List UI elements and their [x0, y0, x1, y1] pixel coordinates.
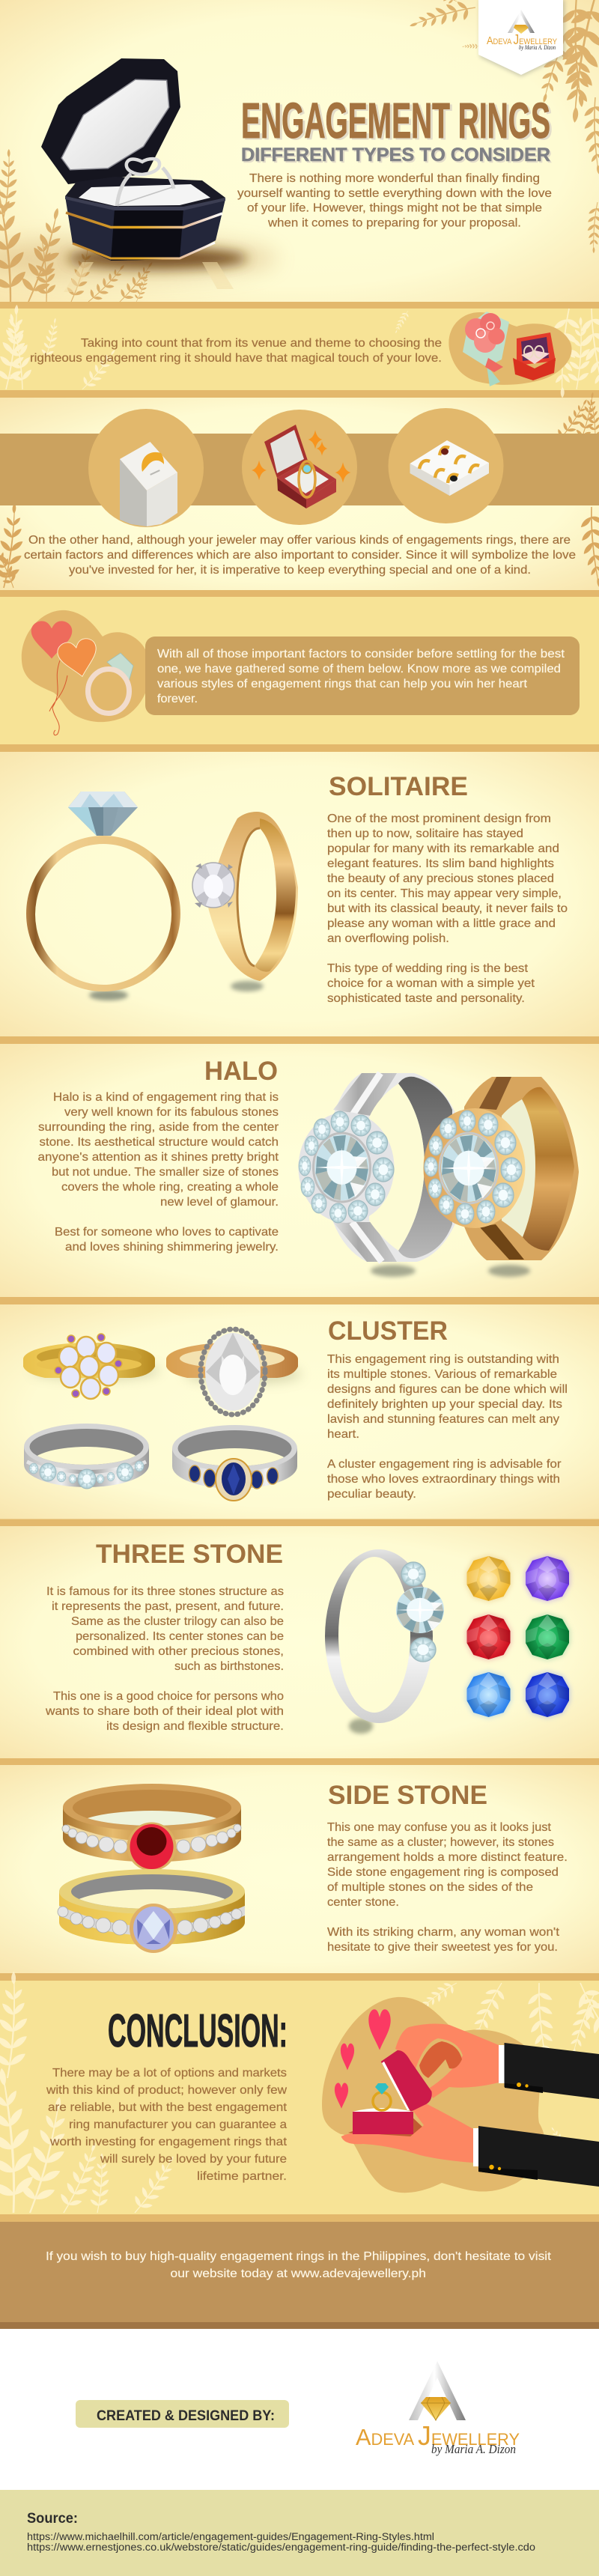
text: solitaire: but with its classical beauty, it never fails to: [327, 902, 568, 915]
icons: birthstone gems: [466, 1555, 570, 1718]
text: solitaire: on its center. This may appear very simple,: [327, 887, 562, 900]
text: three stone: it represents the past, present, and future.: [52, 1600, 284, 1613]
heading: solitaire: SOLITAIRE: [329, 772, 468, 801]
panel: solitaire: [0, 752, 599, 1036]
icon: red jewelry box: [242, 410, 357, 525]
text: side stone: the same as a cluster; however, its stones: [327, 1836, 554, 1849]
logo: Adeva Jewellery: [356, 2361, 520, 2456]
logo: Adeva Jewellery: ADEVA JEWELLERY: [356, 2420, 520, 2451]
illustration: ruby side stone ring: [62, 1784, 241, 1871]
text: solitaire: [327, 812, 568, 1005]
text: halo: stone. Its aesthetical structure would catch: [39, 1136, 279, 1149]
panel: conclusion: [0, 1970, 599, 2222]
intro text: There is nothing more wonderful than finally finding: [249, 172, 540, 185]
panel: side stone: [0, 1758, 599, 1981]
text: side stone: of multiple stones on the sides of the: [327, 1881, 533, 1894]
panel: sources: [0, 2490, 599, 2576]
text: halo: [37, 1091, 279, 1254]
text: side stone: arrangement holds a more distinct feature.: [327, 1851, 568, 1864]
panel: cluster: [0, 1297, 599, 1526]
foliage: factors edges: [0, 390, 599, 591]
factors text: On the other hand, although your jeweler may offer various kinds of engagements rings, there are: [28, 534, 571, 547]
text: three stone: This one is a good choice for persons who: [53, 1690, 284, 1703]
panel: halo: [0, 1036, 599, 1297]
factors text: [24, 534, 576, 577]
icon: ring on pedestal: [88, 409, 204, 527]
text: conclusion: There may be a lot of options and markets: [52, 2067, 287, 2080]
band text: [30, 337, 442, 365]
text: halo: but not undue. The smaller size of stones: [52, 1166, 279, 1179]
text: three stone: combined with other precious stones,: [73, 1645, 284, 1658]
text: cluster: This engagement ring is outstanding with: [327, 1353, 559, 1366]
text: solitaire: One of the most prominent design from: [327, 812, 551, 825]
foliage: band white leaves: [0, 303, 599, 399]
subtitle: DIFFERENT TYPES TO CONSIDER: [241, 145, 550, 165]
text: conclusion: [46, 2067, 288, 2183]
band text: Taking into count that from its venue and theme to choosing the: [81, 337, 442, 350]
panel: call to action: If you wish to buy high-quality engagement rings in the Philippines, don't hesitate to visit: [46, 2250, 552, 2263]
panel: venue band: [0, 302, 599, 399]
text: three stone: wants to share both of their ideal plot with: [45, 1705, 284, 1718]
text: three stone: It is famous for its three stones structure as: [46, 1585, 284, 1598]
panel: credits: [0, 2329, 599, 2490]
heading: halo: HALO: [204, 1057, 278, 1086]
text: solitaire: sophisticated taste and personality.: [327, 992, 525, 1005]
illustration: hands offering ring box: [322, 1997, 599, 2193]
text: solitaire: This type of wedding ring is the best: [327, 962, 529, 975]
illustration: gold halo ring: [424, 1077, 579, 1277]
illustration: tanzanite side stone ring: [58, 1869, 245, 1953]
panel: factors: [0, 390, 599, 591]
text: halo: and loves shining shimmering jewelry.: [65, 1241, 279, 1254]
illustration: silver diamond band: [24, 1424, 149, 1489]
text: halo: Best for someone who loves to captivate: [55, 1226, 279, 1239]
heading: three stone: THREE STONE: [96, 1540, 283, 1569]
source links: [27, 2531, 535, 2553]
text: solitaire: the beauty of any precious stones placed: [327, 872, 554, 885]
callout: compiled styles: forever.: [157, 693, 198, 705]
panel: three stone: [0, 1526, 599, 1758]
text: conclusion: are reliable, but with the best engagement: [48, 2101, 288, 2114]
text: solitaire: please any woman with a little grace and: [327, 917, 556, 930]
text: conclusion: worth investing for engagement rings that: [49, 2136, 288, 2148]
text: cluster: A cluster engagement ring is advisable for: [327, 1458, 562, 1471]
intro text: [237, 172, 552, 229]
text: conclusion: ring manufacturer you can guarantee a: [69, 2118, 287, 2131]
band text: righteous engagement ring it should have that magical touch of your love.: [30, 352, 442, 365]
text: cluster: heart.: [327, 1428, 359, 1441]
illustration: ring box: [0, 58, 277, 292]
text: halo: very well known for its fabulous stones: [64, 1106, 279, 1119]
text: halo: anyone's attention as it shines pretty bright: [37, 1151, 279, 1164]
text: halo: new level of glamour.: [160, 1196, 279, 1209]
text: side stone: With its striking charm, any woman won't: [327, 1926, 560, 1939]
credit pill: CREATED & DESIGNED BY:: [97, 2408, 275, 2424]
text: three stone: its design and flexible structure.: [106, 1720, 284, 1733]
icon: balloons and ring: [22, 610, 150, 735]
heading: cluster: CLUSTER: [328, 1316, 448, 1346]
panel: call to action: our website today at www.adevajewellery.ph: [171, 2267, 426, 2280]
text: cluster: designs and figures can be done which will: [327, 1383, 568, 1396]
brand badge: ADEVA JEWELLERY: [487, 32, 558, 47]
source links: https://www.ernestjones.co.uk/webstore/static/guides/engagement-ring-guide/finding-the-perfect-style.cdo: [27, 2542, 535, 2553]
text: conclusion: with this kind of product; however only few: [46, 2084, 287, 2097]
text: cluster: lavish and stunning features can melt any: [327, 1413, 559, 1426]
source links: https://www.michaelhill.com/article/engagement-guides/Engagement-Ring-Styles.html: [27, 2531, 434, 2542]
brown band: [0, 434, 599, 505]
text: conclusion: lifetime partner.: [197, 2170, 287, 2183]
logo: Adeva Jewellery: by Maria A. Dizon: [431, 2442, 516, 2456]
text: three stone: personalized. Its center stones can be: [76, 1630, 284, 1643]
heading: source: Source:: [27, 2511, 78, 2527]
heading: side stone: SIDE STONE: [328, 1781, 487, 1810]
credit pill: [76, 2400, 289, 2428]
text: solitaire: choice for a woman with a simple yet: [327, 977, 535, 990]
text: halo: covers the whole ring, creating a whole: [61, 1181, 279, 1194]
icon: ring tray: [388, 408, 503, 523]
brand badge: [478, 0, 565, 76]
callout: compiled styles: With all of those important factors to consider before settling for the best: [157, 648, 565, 660]
factors text: you've invested for her, it is imperative to keep everything special and one of a kind.: [69, 564, 531, 577]
text: solitaire: an overflowing polish.: [327, 932, 449, 945]
callout: compiled styles: [145, 637, 580, 715]
illustration: gold amethyst cluster ring: [23, 1334, 159, 1399]
illustration: solitaire rings: [26, 792, 298, 1000]
text: solitaire: elegant features. Its slim band highlights: [327, 857, 554, 870]
text: solitaire: popular for many with its remarkable and: [327, 842, 559, 855]
text: side stone: hesitate to give their sweetest yes for you.: [327, 1941, 558, 1954]
intro text: when it comes to preparing for your proposal.: [267, 217, 521, 229]
text: cluster: [327, 1353, 568, 1501]
text: solitaire: then up to now, solitaire has stayed: [327, 827, 523, 840]
text: conclusion: will surely be loved by your future: [100, 2153, 287, 2166]
factors text: certain factors and differences which are also important to consider. Since it will symbolize the love: [24, 549, 576, 562]
text: halo: Halo is a kind of engagement ring that is: [53, 1091, 279, 1104]
callout: compiled styles: various styles of engagement rings that can help you win her heart: [157, 678, 528, 690]
text: side stone: This one may confuse you as it looks just: [327, 1821, 552, 1834]
text: side stone: center stone.: [327, 1896, 399, 1909]
text: three stone: [45, 1585, 284, 1733]
text: halo: surrounding the ring, aside from the center: [38, 1121, 279, 1134]
foliage: conclusion white leaves: [0, 1970, 599, 2220]
heading: conclusion: CONCLUSION:: [108, 2005, 288, 2057]
text: cluster: peculiar beauty.: [327, 1488, 416, 1501]
text: side stone: [327, 1821, 568, 1954]
panel: call to action: [0, 2214, 599, 2329]
text: cluster: those who loves extraordinary things with: [327, 1473, 560, 1486]
intro text: yourself wanting to settle everything down with the love: [237, 187, 552, 200]
text: three stone: such as birthstones.: [174, 1660, 284, 1673]
illustration: silver sapphire band: [172, 1425, 297, 1501]
text: cluster: its multiple stones. Various of remarkable: [327, 1368, 557, 1381]
text: three stone: Same as the cluster trilogy can also be: [71, 1615, 284, 1628]
panel: hero: [0, 0, 599, 308]
foliage: hero corners: [0, 0, 599, 308]
brand badge: by Maria A. Dizon: [519, 44, 556, 51]
icon: bouquet and ring box: [449, 312, 572, 386]
panel: compiled styles intro: [0, 590, 599, 752]
illustration: rose gold marquise ring: [166, 1329, 302, 1415]
illustration: silver halo ring: [298, 1073, 457, 1277]
illustration: three stone ring: [325, 1549, 444, 1734]
callout: compiled styles: one, we have gathered some of them below. Know more as we compiled: [157, 663, 561, 675]
text: cluster: definitely brighten up your special day. Its: [327, 1398, 562, 1411]
text: side stone: Side stone engagement ring is composed: [327, 1866, 559, 1879]
intro text: of your life. However, things might not be that simple: [247, 202, 542, 214]
